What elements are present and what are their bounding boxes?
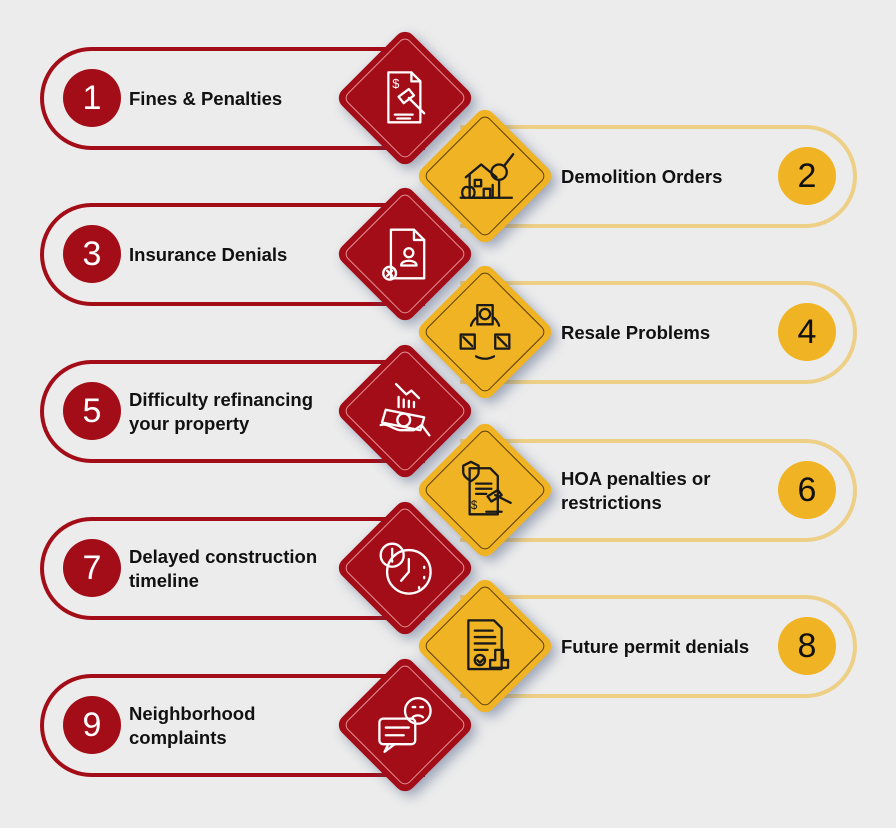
number 7: 7 <box>83 548 101 586</box>
number 7 <box>63 539 121 597</box>
number 6 <box>778 461 836 519</box>
text 9: complaints <box>129 726 227 748</box>
number 4 <box>778 303 836 361</box>
number 3: 3 <box>83 234 101 272</box>
text 5 <box>129 388 313 434</box>
number 9 <box>63 696 121 754</box>
icon diamond 1: fines <box>338 30 482 176</box>
text 1: Fines & Penalties <box>129 88 282 108</box>
text 5: your property <box>129 412 249 434</box>
number 8: 8 <box>798 626 816 664</box>
number 4: 4 <box>798 312 816 350</box>
item 8 pill <box>460 595 857 698</box>
number 9: 9 <box>83 706 101 744</box>
number 8 <box>778 617 836 675</box>
icon diamond 1: fines: $ <box>392 76 399 91</box>
item 5 pill <box>40 360 425 463</box>
text 3: Insurance Denials <box>129 244 287 264</box>
text 7: timeline <box>129 570 199 590</box>
icon diamond 2: demolition <box>418 108 562 254</box>
icon diamond 9: complaints <box>338 658 482 802</box>
number 6: 6 <box>798 470 816 508</box>
text 7 <box>129 546 317 590</box>
number 1 <box>63 69 121 127</box>
icon diamond 6: HOA <box>418 422 562 568</box>
item 2 pill <box>460 125 857 228</box>
number 2: 2 <box>798 156 816 194</box>
text 4: Resale Problems <box>561 322 710 342</box>
icon diamond 7: delay <box>338 500 482 646</box>
item 4 pill <box>460 281 857 384</box>
text 6: restrictions <box>561 492 662 512</box>
icon diamond 8: permit <box>418 578 562 724</box>
text 6 <box>561 468 710 512</box>
text 7: Delayed construction <box>129 546 317 566</box>
item 6 pill <box>460 439 857 542</box>
number 2 <box>778 147 836 205</box>
item 7 pill <box>40 517 425 620</box>
text 9: Neighborhood <box>129 702 255 724</box>
text 8: Future permit denials <box>561 636 749 656</box>
text 9 <box>129 702 255 748</box>
icon diamond 4: resale <box>418 264 562 410</box>
number 1: 1 <box>83 78 101 116</box>
text 2: Demolition Orders <box>561 166 722 186</box>
item 1 pill <box>40 47 425 150</box>
icon diamond 3: insurance <box>338 186 482 332</box>
number 5 <box>63 382 121 440</box>
text 6: HOA penalties or <box>561 468 710 488</box>
item 9 pill <box>40 674 425 777</box>
icon diamond 6: HOA: $ <box>471 500 478 512</box>
number 5: 5 <box>83 392 101 430</box>
number 3 <box>63 225 121 283</box>
icon diamond 5: refinancing <box>338 344 482 488</box>
item 3 pill <box>40 203 425 306</box>
text 5: Difficulty refinancing <box>129 388 313 410</box>
